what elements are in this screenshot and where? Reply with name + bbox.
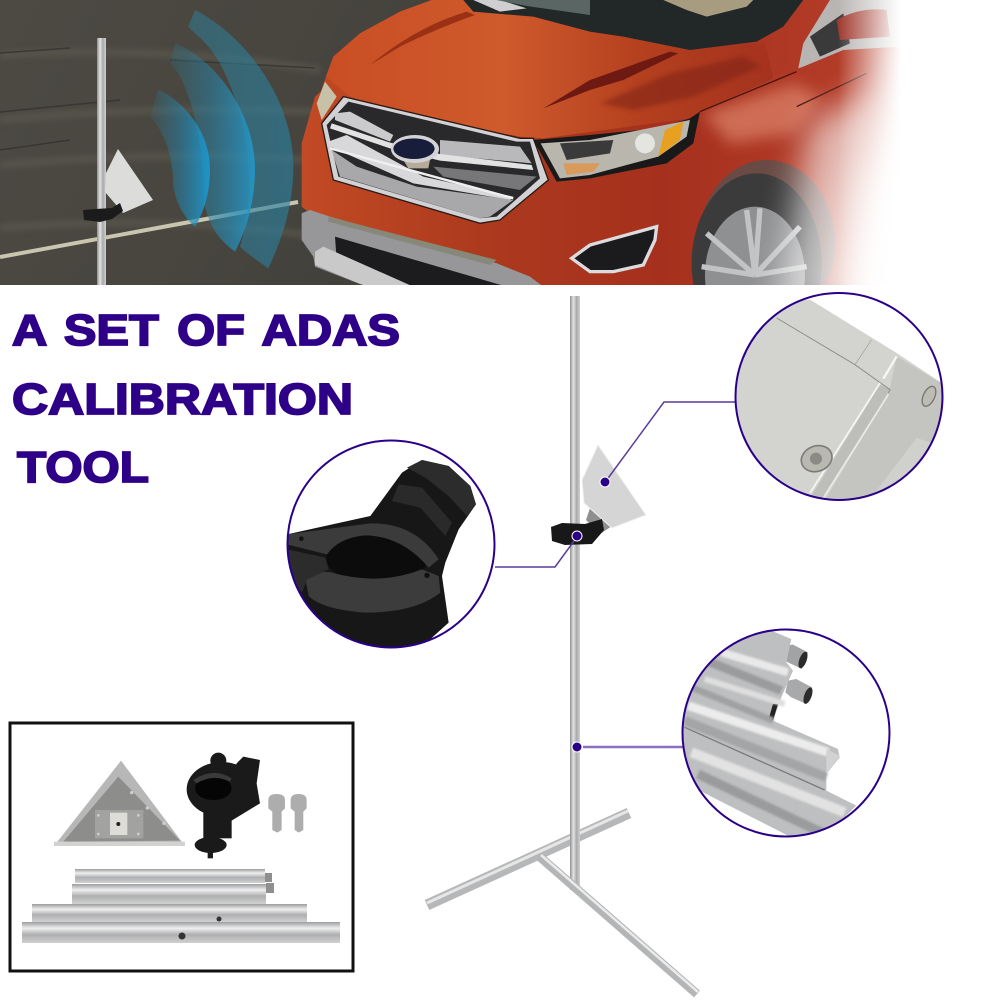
- wheel arch: [703, 160, 835, 285]
- back foot bar: [427, 813, 629, 905]
- bumper: [302, 210, 543, 287]
- front foot bar: [540, 857, 697, 994]
- road surface: [0, 0, 432, 285]
- mount: [586, 508, 612, 534]
- tubes: [22, 869, 340, 943]
- windshield: [463, 0, 803, 50]
- wheel rim: [701, 206, 807, 285]
- title: [12, 306, 400, 492]
- headlight: [533, 112, 700, 182]
- clamp: [551, 519, 604, 545]
- zoom circle: [671, 621, 911, 857]
- callout: tube joint detail: [572, 628, 890, 838]
- callout: clamp detail: [287, 440, 582, 653]
- upper arm: [287, 523, 439, 568]
- hood: [326, 0, 773, 138]
- zoom circle: [727, 293, 947, 508]
- triangle target: [582, 445, 646, 528]
- grille slats: [328, 112, 537, 218]
- leader line: [583, 746, 683, 748]
- tube bodies: [675, 621, 856, 841]
- title line 2: CALIBRATION: [12, 375, 353, 424]
- hood shadow: [600, 57, 760, 110]
- radar waves: [150, 10, 293, 268]
- sensor triangle: [105, 149, 153, 213]
- sensor clamp: [83, 203, 123, 222]
- inset parts box: [10, 723, 353, 971]
- pole: [570, 296, 580, 890]
- white fade: [804, 48, 900, 285]
- clamp part: [187, 753, 260, 858]
- dot: [600, 477, 610, 487]
- car: [302, 0, 898, 285]
- knob: [407, 460, 476, 516]
- bolts: [268, 794, 307, 833]
- car body: [302, 0, 900, 287]
- zoom circle: [287, 440, 494, 653]
- clamp dark base: [287, 460, 476, 653]
- sensor pole: [97, 38, 106, 288]
- callout: triangle detail: [600, 293, 947, 508]
- clamp hole: [326, 536, 426, 578]
- ford logo: [391, 135, 439, 168]
- left headlight sliver: [317, 82, 337, 120]
- side window: [798, 0, 900, 68]
- hood vents: [370, 12, 678, 108]
- grille frame: [322, 97, 548, 223]
- triangle plate: [54, 761, 185, 846]
- fender highlight: [703, 83, 820, 143]
- dot: [572, 531, 582, 541]
- road line: [0, 202, 298, 257]
- dot: [572, 742, 582, 752]
- grille inner: [327, 102, 540, 218]
- collar: [392, 484, 452, 536]
- hero photo: car and sensor target: [0, 0, 898, 285]
- title line 3: TOOL: [17, 443, 149, 492]
- lower crescent: [305, 569, 440, 613]
- tube highlights: [685, 652, 845, 834]
- leader line: [606, 402, 735, 481]
- main assembled stand: [427, 296, 698, 994]
- title line 1: A SET OF ADAS: [12, 306, 400, 355]
- wheel tire: [692, 173, 822, 285]
- leader line: [495, 541, 574, 567]
- left arm: [287, 549, 329, 593]
- body crease line: [700, 72, 867, 112]
- fog lamp: [572, 227, 657, 272]
- studs: [783, 645, 814, 705]
